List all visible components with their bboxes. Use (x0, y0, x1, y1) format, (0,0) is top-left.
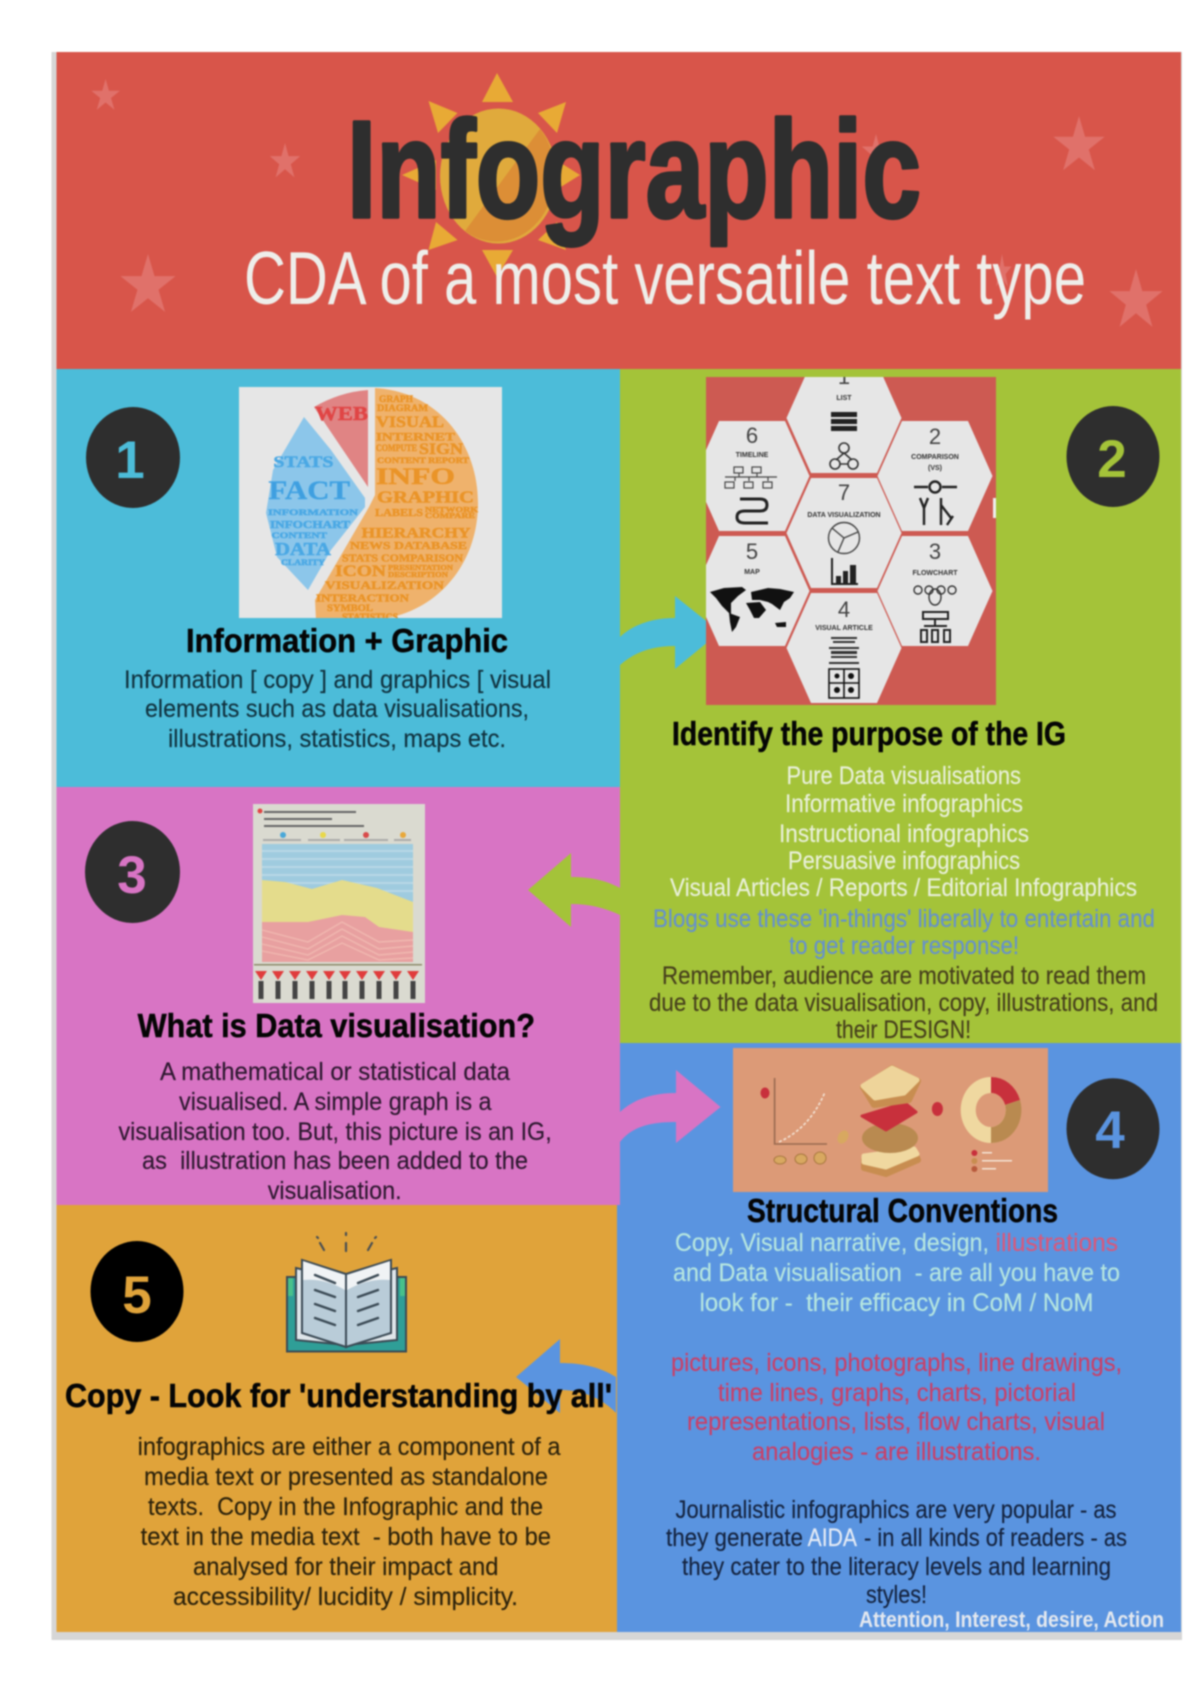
number badge 1: 1 (115, 431, 145, 490)
reminder text: Remember, audience are motivated to read them (662, 962, 1146, 990)
body text: analysed for their impact and (193, 1553, 498, 1581)
body text: visualisation too. But, this picture is an IG, (118, 1118, 552, 1146)
heading: information + graphic: Information + Graphic (186, 622, 508, 659)
image: word cloud pie chart (239, 387, 502, 622)
image: seven types of infographic hexagons: VISUAL ARTICLE (815, 625, 873, 632)
image: word cloud pie chart: NEWS DATABASE (350, 540, 467, 552)
body text: visualised. A simple graph is a (179, 1088, 492, 1116)
number badge 4 (1066, 1078, 1160, 1179)
list of infographic types: Pure Data visualisations (786, 762, 1021, 790)
panel 1: information + graphic (86, 387, 551, 753)
image: word cloud pie chart: SIGN (419, 441, 464, 458)
panel 2: purpose of the IG (649, 363, 1160, 1044)
image: word cloud pie chart: COMPARE (425, 512, 475, 520)
list of infographic types (670, 762, 1137, 902)
image: seven types of infographic hexagons: COMPARISON (911, 454, 959, 461)
image: word cloud pie chart: STATS (273, 454, 334, 471)
image: word cloud pie chart: INTERACTION (316, 594, 410, 604)
blogs note: to get reader response! (789, 932, 1019, 960)
image: word cloud pie chart: COMPUTE (376, 443, 417, 453)
image: word cloud pie chart: DATA (275, 539, 331, 559)
number badge 4: 4 (1095, 1101, 1125, 1160)
image: word cloud pie chart: VISUAL (376, 414, 444, 431)
body text: media text or presented as standalone (144, 1463, 548, 1491)
number badge 3 (85, 821, 180, 923)
arrow: section 3 to 4 (620, 1070, 721, 1143)
list of infographic types: Instructional infographics (779, 820, 1029, 848)
image: word cloud pie chart: INFO (376, 464, 455, 489)
image: word cloud pie chart: GRAPHIC (377, 488, 474, 506)
journalistic infographics text (666, 1496, 1127, 1609)
list of infographic types: Visual Articles / Reports / Editorial Infographics (670, 874, 1137, 902)
header (91, 73, 1163, 327)
image: seven types of infographic hexagons: TIMELINE (736, 452, 769, 459)
image: word cloud pie chart: DESCRIPTION (388, 571, 448, 579)
illustrations definition: pictures, icons, photographs, line drawings, (671, 1349, 1122, 1377)
body text: infographics are either a component of a (138, 1433, 561, 1461)
what to look for: Copy, Visual narrative, design, (675, 1229, 989, 1257)
image: seven types of infographic hexagons: DATA VISUALIZATION (807, 512, 881, 519)
image: seven types of infographic hexagons: 4 (838, 597, 850, 622)
image: word cloud pie chart: DIAGRAM (377, 403, 429, 413)
image: word cloud pie chart: STATS COMPARISON (342, 554, 464, 564)
heading: copy: Copy - Look for 'understanding by all' (65, 1377, 612, 1414)
number badge 5: 5 (122, 1266, 152, 1325)
image: word cloud pie chart: CONTENT (272, 531, 328, 540)
body text: as illustration has been added to the (142, 1147, 528, 1175)
image: seven types of infographic hexagons: 1 (838, 364, 850, 389)
reminder text (649, 962, 1158, 1044)
what to look for: and Data visualisation - are all you have to (673, 1259, 1120, 1287)
image: word cloud pie chart: GRAPH (379, 394, 413, 404)
number badge 2 (1066, 406, 1160, 507)
image: word cloud pie chart: FACT (268, 476, 350, 505)
icon: sun (402, 73, 580, 277)
list of infographic types: Persuasive infographics (788, 847, 1020, 875)
image: seven types of infographic hexagons: LIST (836, 395, 852, 402)
body text: A mathematical or statistical data (160, 1058, 510, 1086)
image: data visualisation chart (253, 804, 425, 1003)
image: word cloud pie chart: SYMBOL (327, 603, 373, 613)
panel 5: copy (65, 1233, 612, 1611)
body text: elements such as data visualisations, (145, 695, 529, 723)
number badge 5 (90, 1241, 184, 1342)
image: seven types of infographic hexagons: 2 (929, 424, 941, 449)
illustrations definition (671, 1349, 1122, 1466)
illustrations definition: time lines, graphs, charts, pictorial (718, 1379, 1076, 1407)
body text: illustrations, statistics, maps etc. (168, 725, 506, 753)
number badge 2: 2 (1097, 430, 1127, 489)
body text: visualisation. (268, 1177, 402, 1205)
body text: texts. Copy in the Infographic and the (148, 1493, 543, 1521)
panel 4: structural conventions (666, 1048, 1164, 1632)
image: word cloud pie chart: LABELS (375, 507, 423, 519)
image: seven types of infographic hexagons: MAP (744, 569, 760, 576)
image: word cloud pie chart: INFOCHART (270, 520, 350, 531)
panel 3: data visualisation (85, 804, 552, 1205)
body text (124, 666, 551, 753)
journalistic infographics text: styles! (866, 1581, 927, 1609)
journalistic infographics text: - in all kinds of readers - as (864, 1524, 1127, 1552)
journalistic infographics text: they cater to the literacy levels and learning (682, 1553, 1111, 1581)
body text (118, 1058, 552, 1205)
image: word cloud pie chart: INTERNET (376, 430, 455, 444)
heading: identify the purpose: Identify the purpose of the IG (672, 715, 1066, 752)
reminder text: their DESIGN! (836, 1016, 971, 1044)
icon: open book (287, 1233, 406, 1352)
what to look for: illustrations (996, 1229, 1118, 1257)
title: Infographic (347, 93, 921, 247)
body text: text in the media text - both have to be (141, 1523, 551, 1551)
body text: accessibility/ lucidity / simplicity. (173, 1583, 518, 1611)
what to look for: look for - their efficacy in CoM / NoM (700, 1289, 1094, 1317)
number badge 3: 3 (117, 846, 147, 905)
journalistic infographics text: AIDA (808, 1524, 857, 1552)
body text (138, 1433, 561, 1611)
image: word cloud pie chart: INFORMATION (268, 508, 358, 517)
image: word cloud pie chart: VISUALIZATION (325, 578, 444, 592)
blogs note: Blogs use these 'in-things' liberally to entertain and (653, 905, 1155, 933)
image: word cloud pie chart: ICON (335, 563, 387, 580)
image: seven types of infographic hexagons (694, 363, 996, 705)
body text: Information [ copy ] and graphics [ visual (124, 666, 551, 694)
illustrations definition: representations, lists, flow charts, visual (687, 1408, 1105, 1436)
arrow: section 1 to 2 (620, 596, 720, 669)
image: word cloud pie chart: PRESENTATION (388, 564, 453, 572)
image: word cloud pie chart: NETWORK (425, 506, 479, 514)
journalistic infographics text: they generate (666, 1524, 803, 1552)
heading: structural conventions: Structural Conventions (747, 1192, 1058, 1229)
image: seven types of infographic hexagons: 7 (838, 480, 850, 505)
arrow: section 4 to 5 (516, 1339, 616, 1413)
number badge 1 (86, 407, 180, 508)
image: word cloud pie chart: STATISTICS (342, 612, 398, 622)
blogs note (653, 905, 1155, 960)
image: word cloud pie chart: CONTENT REPORT (377, 456, 470, 465)
background stars (91, 79, 1163, 327)
image: seven types of infographic hexagons: FLOWCHART (912, 570, 958, 577)
journalistic infographics text: Journalistic infographics are very popular - as (676, 1496, 1116, 1524)
what to look for (673, 1229, 1120, 1317)
AIDA expansion: Attention, Interest, desire, Action (859, 1607, 1164, 1632)
image: seven types of infographic hexagons: (VS) (928, 465, 942, 472)
image: seven types of infographic hexagons: 6 (746, 423, 758, 448)
image: seven types of infographic hexagons: 3 (929, 539, 941, 564)
illustrations definition: analogies - are illustrations. (752, 1438, 1041, 1466)
image: word cloud pie chart: HIERARCHY (362, 526, 471, 542)
image: sandwich data illustration (733, 1048, 1048, 1192)
image: word cloud pie chart: CLARITY (281, 558, 325, 567)
arrow: section 2 to 3 (528, 853, 620, 927)
list of infographic types: Informative infographics (785, 790, 1023, 818)
image: word cloud pie chart: WEB (315, 403, 368, 425)
heading: what is data visualisation: What is Data visualisation? (138, 1007, 535, 1044)
image: seven types of infographic hexagons: 5 (746, 539, 758, 564)
